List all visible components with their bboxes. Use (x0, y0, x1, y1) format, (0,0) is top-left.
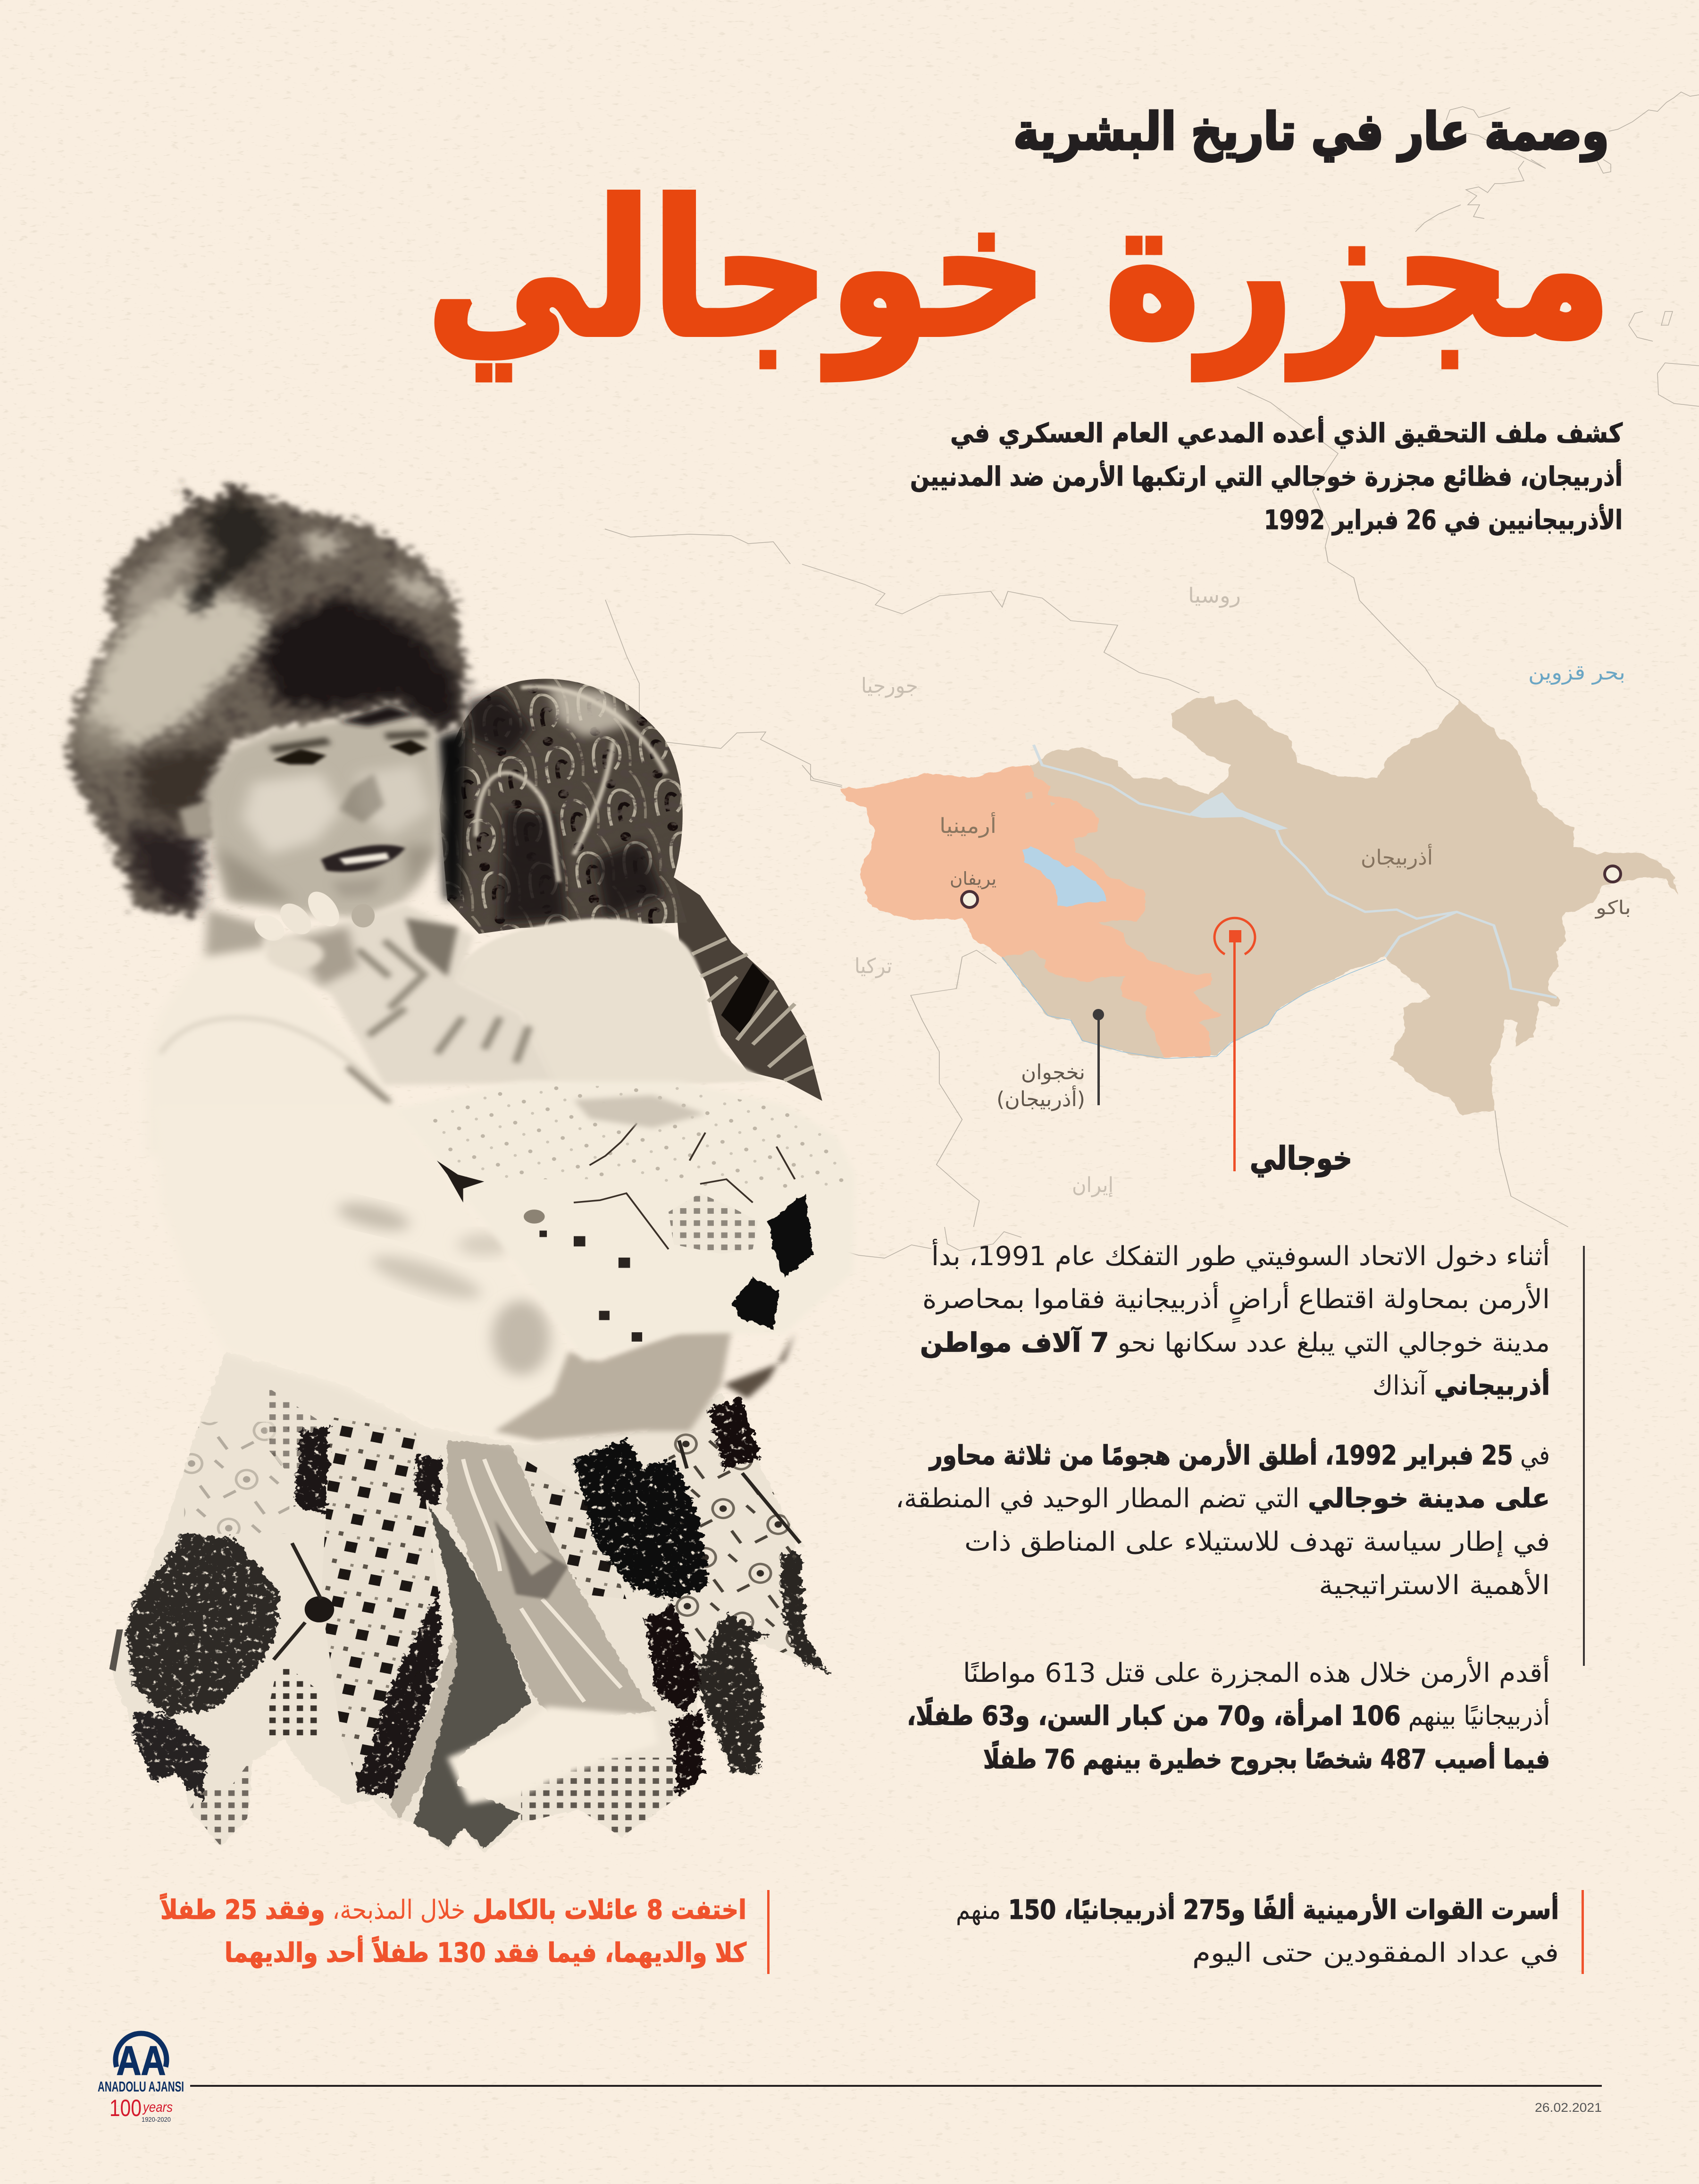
callout: families (160, 1890, 770, 1974)
map labels: أرمينيا (939, 812, 996, 838)
body paragraph 1: مدينة خوجالي التي يبلغ عدد سكانها نحو 7 آلاف مواطن (920, 1326, 1550, 1358)
Anadolu Agency logo: 1920-2020 (142, 2116, 171, 2123)
body paragraph 1: أثناء دخول الاتحاد السوفيتي طور التفكك عام 1991، بدأ (931, 1239, 1550, 1272)
map labels: إيران (1072, 1173, 1113, 1197)
body paragraph 2 (896, 1438, 1550, 1601)
map labels: أذربيجان (1361, 844, 1433, 870)
body paragraph 2: على مدينة خوجالي التي تضم المطار الوحيد في المنطقة، (896, 1483, 1550, 1514)
skirt (109, 1352, 829, 1853)
child's sweater and neck (147, 909, 416, 1157)
callout: prisoners: في عداد المفقودين حتى اليوم (1192, 1938, 1559, 1968)
Azerbaijani enclaves (1025, 791, 1096, 850)
callout: families: كلا والديهما، فيما فقد 130 طفلاً أحد والديهما (225, 1935, 746, 1968)
body paragraph 2: في 25 فبراير 1992، أطلق الأرمن هجومًا من ثلاثة محاور (928, 1438, 1550, 1471)
map labels: نخجوان (1021, 1060, 1085, 1084)
callout: families: اختفت 8 عائلات بالكامل خلال المذبحة، وفقد 25 طفلاً (160, 1893, 746, 1925)
photo lower part (109, 1081, 855, 1853)
body paragraph 1: أذربيجاني آنذاك (1373, 1368, 1550, 1401)
Yerevan marker (962, 891, 978, 907)
Anadolu Agency logo: ANADOLU AJANSI (98, 2078, 184, 2095)
Armenia territory (841, 766, 1221, 1058)
callout: prisoners: أسرت القوات الأرمينية ألفًا و275 أذربيجانيًا، 150 منهم (956, 1892, 1559, 1925)
body paragraph 3: أذربيجانيًا بينهم 106 امرأة، و70 من كبار السن، و63 طفلًا، (907, 1697, 1550, 1731)
Azerbaijan territory (1002, 696, 1677, 1115)
photo: crying child carrying a baby (66, 480, 855, 1853)
lace blanket (395, 1081, 855, 1361)
intro paragraph: الأذربيجانيين في 26 فبراير 1992 (1264, 504, 1623, 536)
Anadolu Agency logo (98, 2033, 184, 2123)
map of the South Caucasus (841, 696, 1677, 1115)
callout: prisoners (956, 1890, 1584, 1974)
map labels: تركيا (854, 954, 892, 978)
map labels: بحر قزوين (1528, 661, 1625, 685)
body paragraph 3: أقدم الأرمن خلال هذه المجزرة على قتل 613 مواطنًا (963, 1655, 1550, 1688)
map labels: (أذربيجان) (996, 1085, 1085, 1111)
body vertical rule (1583, 1246, 1585, 1666)
Kura river and Mingachevir lake (1002, 745, 1557, 1058)
body paragraph 1 (920, 1239, 1550, 1401)
faint background map borders (605, 92, 1699, 1258)
Nakhchivan marker and leader (1093, 1009, 1104, 1105)
map labels: باكو (1595, 897, 1631, 919)
fur hat (66, 480, 466, 916)
footer rule (190, 2085, 1602, 2087)
body paragraph 2: الأهمية الاستراتيجية (1319, 1569, 1550, 1601)
body paragraph 3 (907, 1655, 1550, 1775)
intro paragraph: كشف ملف التحقيق الذي أعده المدعي العام العسكري في (950, 416, 1623, 449)
Khojaly marker and leader (1214, 918, 1255, 1171)
map labels (854, 584, 1631, 1197)
Anadolu Agency logo: 100 (109, 2095, 142, 2121)
body paragraph 3: فيما أصيب 487 شخصًا بجروح خطيرة بينهم 76 طفلًا (983, 1740, 1550, 1775)
child's hand under the blanket (495, 1328, 795, 1440)
photo upper part (66, 480, 822, 1157)
map labels: روسيا (1188, 584, 1241, 608)
Lake Sevan (1024, 847, 1107, 907)
Baku marker (1605, 866, 1621, 882)
body paragraph 2: في إطار سياسة تهدف للاستيلاء على المناطق ذات (964, 1527, 1550, 1558)
map labels: يريفان (950, 868, 996, 890)
date: 26.02.2021 (1535, 2100, 1602, 2115)
child's sweater lower part (152, 1105, 584, 1445)
baby's striped sleeve and hand (249, 887, 555, 1085)
headscarf (437, 679, 687, 934)
Anadolu Agency logo: AA (117, 2038, 166, 2083)
baby's back (458, 918, 769, 1087)
body paragraph 1: الأرمن بمحاولة اقتطاع أراضٍ أذربيجانية فقاموا بمحاصرة (922, 1282, 1550, 1324)
child's face (179, 706, 442, 918)
map labels: خوجالي (1250, 1140, 1352, 1177)
intro paragraph (910, 416, 1623, 536)
map labels: جورجيا (861, 674, 918, 698)
subtitle: وصمة عار في تاريخ البشرية (1013, 102, 1609, 162)
Anadolu Agency logo: years (142, 2100, 173, 2115)
striped shawl (674, 877, 822, 1101)
